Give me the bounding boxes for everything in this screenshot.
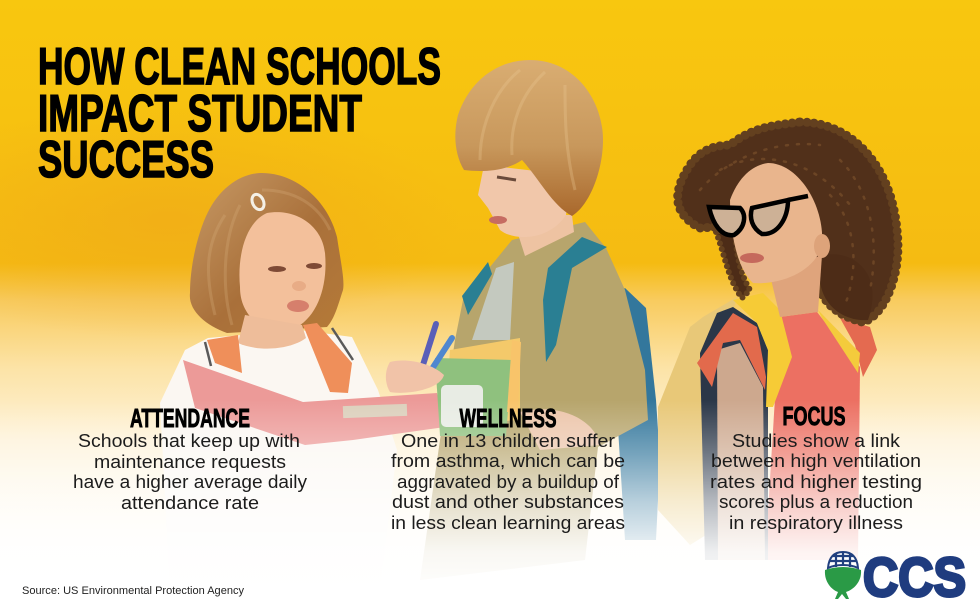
boy features — [489, 177, 516, 224]
wellness text — [391, 431, 625, 533]
wellness heading: WELLNESS — [460, 403, 556, 433]
right sleeve — [840, 318, 877, 377]
title: HOW CLEAN SCHOOLS — [38, 38, 441, 96]
neck — [770, 255, 822, 317]
left arm — [717, 343, 765, 560]
focus heading: FOCUS — [782, 401, 846, 431]
attendance text: have a higher average daily — [73, 472, 307, 492]
boy neck — [512, 215, 574, 256]
girl neck — [238, 315, 306, 349]
focus text: scores plus a reduction — [719, 492, 913, 512]
wellness text: aggravated by a buildup of — [397, 472, 620, 492]
strap edges — [205, 328, 353, 366]
yellow backpack — [658, 297, 737, 545]
boy hand — [386, 361, 444, 393]
mouth — [740, 253, 764, 263]
right strap — [818, 310, 860, 373]
open notebook — [183, 360, 445, 445]
hair highlights — [700, 144, 874, 305]
wellness text: from asthma, which can be — [391, 451, 625, 471]
logo wordmark: CCS — [863, 546, 966, 608]
curly hair — [678, 122, 898, 322]
wellness text: in less clean learning areas — [391, 513, 625, 533]
wellness text: One in 13 children suffer — [401, 431, 615, 451]
hair clip — [250, 192, 266, 212]
attendance text: Schools that keep up with — [78, 431, 300, 451]
girl hair — [190, 173, 343, 333]
focus text: rates and higher testing — [710, 472, 922, 492]
face — [730, 163, 822, 283]
backpack straps — [207, 323, 352, 393]
title — [38, 38, 441, 189]
attendance text: attendance rate — [121, 493, 259, 513]
title: SUCCESS — [38, 131, 214, 189]
source note: Source: US Environmental Protection Agency — [22, 585, 244, 597]
boy green notebook — [435, 338, 521, 436]
focus text: between high ventilation — [711, 451, 921, 471]
pencils — [422, 324, 452, 372]
ear — [814, 234, 830, 258]
boy forearm — [520, 409, 600, 450]
boy hair strands — [480, 70, 575, 190]
illustration: girl with open notebook — [160, 173, 445, 590]
black arm lining — [700, 307, 768, 560]
boy undershirt — [472, 262, 514, 340]
white fade over children — [0, 400, 980, 595]
section: attendance — [73, 403, 307, 513]
section: focus — [710, 401, 922, 533]
logo: CCS — [825, 546, 966, 608]
focus text — [710, 431, 922, 533]
attendance heading: ATTENDANCE — [130, 403, 250, 433]
attendance text: maintenance requests — [94, 452, 286, 472]
boy shirt — [420, 222, 648, 580]
boy backpack straps — [462, 237, 607, 362]
boy hair — [455, 60, 603, 216]
bottom white strip — [0, 594, 980, 612]
girl face — [239, 212, 326, 330]
girl shirt — [160, 330, 397, 590]
wellness text: dust and other substances — [392, 492, 624, 512]
illustration: boy with backpack — [386, 60, 660, 580]
girl hair strands — [208, 190, 330, 325]
title: IMPACT STUDENT — [38, 85, 362, 143]
illustration: girl with glasses — [658, 122, 898, 560]
attendance text — [73, 431, 307, 513]
coral dress — [765, 312, 860, 560]
girl features — [268, 263, 322, 312]
yellow backpack strap — [733, 293, 792, 407]
logo globe icon — [825, 552, 861, 599]
focus text: Studies show a link — [732, 431, 901, 451]
boy backpack — [610, 288, 660, 540]
section: wellness — [391, 403, 625, 533]
left sleeve — [697, 313, 766, 390]
glasses — [709, 196, 808, 235]
focus text: in respiratory illness — [729, 513, 903, 533]
boy face — [478, 165, 570, 237]
